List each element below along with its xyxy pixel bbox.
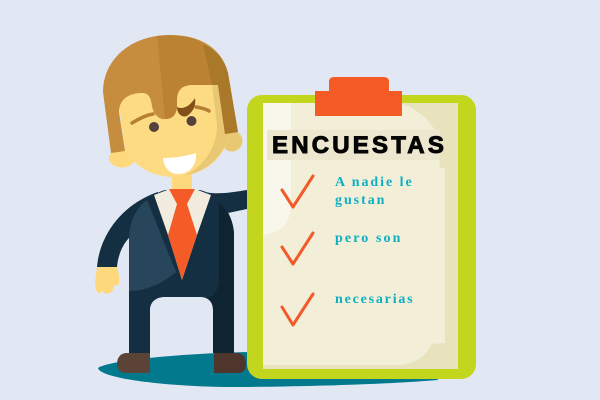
clip xyxy=(315,77,402,116)
left eye xyxy=(149,122,159,132)
left ear xyxy=(109,148,135,168)
character xyxy=(95,35,247,373)
check 2 xyxy=(282,233,313,264)
item 1 text: A nadie le xyxy=(335,175,414,190)
right ear xyxy=(222,130,242,152)
item 2 text: pero son xyxy=(335,231,402,246)
clipboard board xyxy=(247,95,476,379)
necktie xyxy=(168,189,197,280)
item 1 text: gustan xyxy=(335,193,386,208)
hair dark tone xyxy=(203,44,238,134)
title: ENCUESTAS xyxy=(272,132,447,159)
smile xyxy=(163,153,196,174)
right eye xyxy=(186,116,196,126)
face xyxy=(119,85,230,177)
right shoe xyxy=(214,353,246,373)
paper highlight xyxy=(263,103,291,235)
hair xyxy=(103,35,238,153)
paper front sheet xyxy=(263,103,445,365)
clipboard xyxy=(247,77,476,379)
left arm xyxy=(97,192,160,267)
shirt collar xyxy=(154,189,211,280)
right arm xyxy=(205,190,247,215)
left shoe xyxy=(117,353,150,373)
suit body and legs xyxy=(129,190,234,353)
title background xyxy=(267,130,440,160)
right eyebrow xyxy=(196,107,209,111)
left hand xyxy=(95,267,119,294)
check 3 xyxy=(282,294,313,325)
hair curl xyxy=(177,98,195,116)
ground shadow xyxy=(98,352,438,387)
paper back sheet xyxy=(263,103,458,369)
suit highlight xyxy=(129,200,176,291)
suit shade xyxy=(208,203,234,353)
hair mid tone xyxy=(157,35,212,119)
item 3 text: necesarias xyxy=(335,292,414,307)
face shade xyxy=(183,85,230,176)
neck xyxy=(172,175,192,191)
check 1 xyxy=(282,176,313,207)
left eyebrow xyxy=(132,114,153,123)
